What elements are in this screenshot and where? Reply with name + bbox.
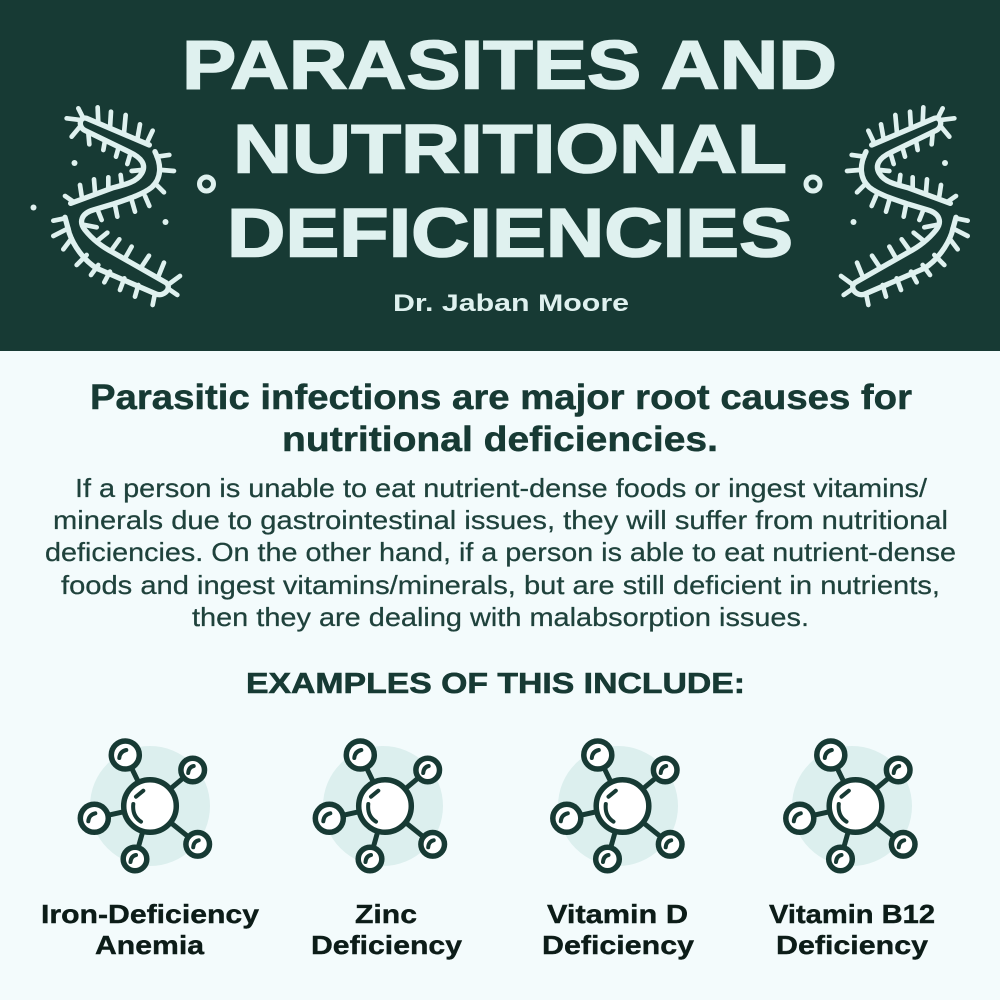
example: iron-deficiency anemia: Iron-Deficiency: [41, 899, 260, 929]
example: iron-deficiency anemia: Anemia: [95, 930, 205, 960]
icon: molecule: [315, 741, 444, 871]
example: zinc deficiency: [311, 741, 463, 960]
icon: left ring: [200, 177, 214, 191]
title: NUTRITIONAL: [233, 110, 787, 188]
example: vitamin b12 deficiency: [769, 741, 935, 960]
body text: minerals due to gastrointestinal issues, they will suffer from nutritional: [53, 505, 948, 535]
icon: right ring: [806, 177, 820, 191]
title: DEFICIENCIES: [227, 194, 793, 272]
body text: foods and ingest vitamins/minerals, but are still deficient in nutrients,: [61, 570, 940, 600]
heading: Parasitic infections are major root causes for: [90, 378, 912, 417]
section heading: EXAMPLES OF THIS INCLUDE:: [246, 668, 745, 700]
icon: left dots: [30, 160, 168, 225]
body text: then they are dealing with malabsorption issues.: [192, 602, 809, 632]
body text: deficiencies. On the other hand, if a person is able to eat nutrient-dense: [45, 537, 956, 567]
heading: [90, 378, 912, 459]
panel: header: [0, 0, 1000, 351]
example: iron-deficiency anemia: [41, 741, 260, 960]
body text: If a person is unable to eat nutrient-dense foods or ingest vitamins/: [75, 473, 928, 503]
body text: [45, 473, 956, 632]
author: Dr. Jaban Moore: [393, 290, 629, 317]
example: vitamin d deficiency: Vitamin D: [547, 899, 688, 929]
icon: right dots: [850, 160, 948, 225]
example: vitamin d deficiency: [542, 741, 695, 960]
example: vitamin d deficiency: Deficiency: [542, 930, 695, 960]
icon: molecule: [80, 741, 210, 871]
icon: molecule: [786, 741, 915, 871]
example: zinc deficiency: Zinc: [355, 899, 417, 929]
icon: molecule: [553, 741, 682, 871]
icon: left parasite: [53, 107, 180, 305]
example: vitamin b12 deficiency: Vitamin B12: [769, 899, 935, 929]
example: zinc deficiency: Deficiency: [311, 930, 463, 960]
title: [182, 26, 837, 272]
heading: nutritional deficiencies.: [282, 420, 718, 459]
icon: right parasite: [841, 107, 968, 305]
title: PARASITES AND: [182, 26, 837, 104]
example: vitamin b12 deficiency: Deficiency: [776, 930, 929, 960]
